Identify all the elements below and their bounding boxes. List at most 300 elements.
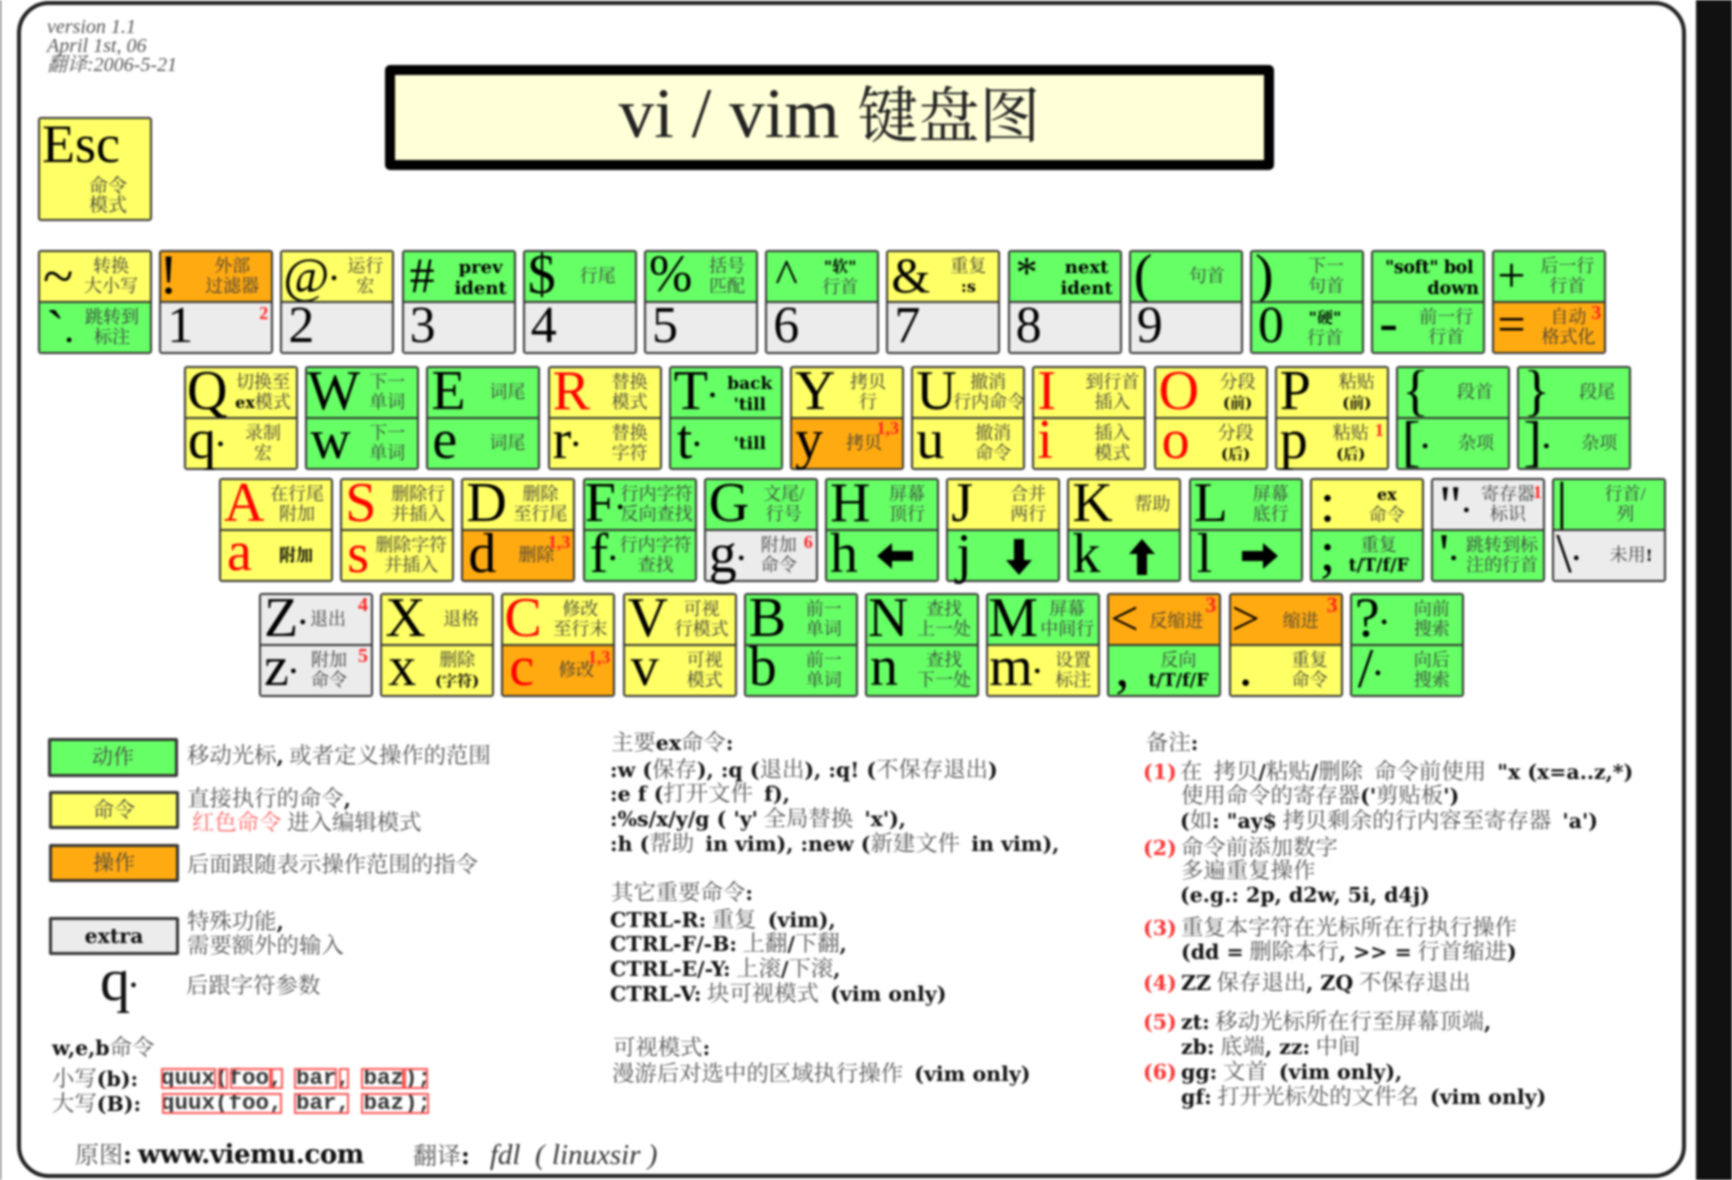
key: H h: h bbox=[830, 523, 858, 585]
key: less-than comma: t/T/f/F bbox=[1148, 671, 1208, 691]
key: K k: 帮助 bbox=[1134, 494, 1170, 514]
ex commands column bbox=[609, 730, 1059, 1088]
key: F f: 行内字符 bbox=[620, 535, 692, 555]
key: B b: B bbox=[749, 587, 786, 649]
left edge line bbox=[0, 0, 1, 1180]
key: & 7: :s bbox=[961, 277, 976, 296]
key: B b: 单词 bbox=[806, 670, 842, 690]
key: ! 1: 1 bbox=[167, 297, 193, 354]
key: R r bbox=[548, 366, 662, 470]
key: V v: 模式 bbox=[687, 670, 723, 690]
legend: extra bbox=[49, 917, 179, 955]
key: double quote / single quote: 注的行首 bbox=[1466, 555, 1538, 575]
key: M m: 设置 bbox=[1055, 650, 1091, 670]
key: H h: 屏幕 bbox=[889, 484, 925, 504]
key: pipe / backslash: | bbox=[1556, 472, 1567, 534]
key: T t: t• bbox=[677, 409, 700, 471]
key: F f: 行内字符 bbox=[621, 484, 693, 504]
key: N n: 上一处 bbox=[917, 619, 971, 639]
key: W w: 下一 bbox=[369, 423, 405, 443]
key: question slash: ?• bbox=[1355, 587, 1388, 649]
key: { [: [• bbox=[1402, 411, 1429, 473]
key: tilde / backtick bbox=[38, 250, 152, 354]
key: K k bbox=[1067, 478, 1181, 582]
key: B b: 前一 bbox=[806, 650, 842, 670]
key: less-than comma bbox=[1107, 593, 1221, 697]
key: } ]: ]• bbox=[1523, 411, 1550, 473]
key: S s: 删除字符 bbox=[375, 535, 447, 555]
key: A a: 附加 bbox=[279, 546, 313, 566]
notes column: 使用命令的寄存器('剪贴板') bbox=[1181, 783, 1459, 808]
key: P p: (后) bbox=[1336, 445, 1365, 463]
key: N n: N bbox=[868, 587, 908, 649]
key: @ 2 bbox=[280, 250, 394, 354]
key: M m: 标注 bbox=[1055, 670, 1091, 690]
key: Z z: 退出 bbox=[310, 609, 346, 629]
key: ) 0: 0 bbox=[1258, 297, 1284, 354]
key: W w bbox=[305, 366, 419, 470]
ASDF row bbox=[217, 472, 1668, 586]
key: question slash bbox=[1350, 593, 1464, 697]
key: double quote / single quote: "• bbox=[1439, 475, 1470, 537]
key: Q q: q• bbox=[188, 409, 224, 471]
key: I i: 到行首 bbox=[1085, 372, 1139, 392]
key: % 5: 括号 bbox=[709, 256, 745, 276]
key: H h: 顶行 bbox=[889, 504, 925, 524]
key: R r: 替换 bbox=[612, 423, 648, 443]
key: pipe / backslash: 未用! bbox=[1610, 545, 1653, 565]
key: @ 2: 运行 bbox=[347, 256, 383, 276]
key: P p: (前) bbox=[1342, 394, 1371, 412]
key: L l: l bbox=[1197, 523, 1212, 585]
key: X x: X bbox=[385, 587, 426, 649]
ex lines: :w (保存), :q (退出), :q! (不保存退出) bbox=[610, 757, 998, 782]
key: $ 4: 行尾 bbox=[580, 266, 616, 286]
key: @ 2: 宏 bbox=[356, 276, 374, 296]
notes column: 在 拷贝/粘贴/删除 命令前使用 "x (x=a..z,*) bbox=[1180, 759, 1633, 784]
key: L l: L bbox=[1194, 472, 1228, 534]
key: U u: u bbox=[916, 409, 944, 471]
legend: command: 命令 bbox=[93, 798, 135, 822]
key: colon semicolon: ; bbox=[1320, 521, 1335, 583]
key: colon semicolon: 命令 bbox=[1369, 505, 1405, 525]
key: P p: 1 bbox=[1375, 420, 1384, 440]
key: G g: 文尾/ bbox=[763, 484, 804, 504]
key: C c: 1,3 bbox=[588, 647, 610, 667]
key: Q q: ex模式 bbox=[235, 392, 291, 412]
key: * 8: ident bbox=[1060, 278, 1113, 299]
key: V v bbox=[623, 593, 737, 697]
key: + =: 后一行 bbox=[1540, 256, 1594, 276]
key: double quote / single quote bbox=[1431, 478, 1545, 582]
notes column: gf: 打开光标处的文件名 (vim only) bbox=[1181, 1084, 1546, 1109]
key: I i: I bbox=[1037, 360, 1056, 422]
key: pipe / backslash: 行首/ bbox=[1605, 484, 1646, 504]
key: double quote / single quote: 标识 bbox=[1490, 504, 1526, 524]
key: O o: (后) bbox=[1221, 445, 1250, 463]
legend: extra: extra bbox=[85, 924, 143, 948]
key: question slash: /• bbox=[1358, 638, 1381, 700]
key: A a: a bbox=[227, 521, 252, 583]
key: greater-than period: 3 bbox=[1327, 592, 1338, 617]
key: F f: 查找 bbox=[638, 555, 674, 575]
key: soft bol _ -: 行首 bbox=[1428, 327, 1464, 347]
legend: action bbox=[48, 738, 178, 777]
key: G g: 命令 bbox=[761, 555, 797, 575]
key: L l bbox=[1189, 478, 1303, 582]
ex commands column: CTRL-F/-B: 上翻/下翻, bbox=[610, 931, 847, 956]
key: V v: V bbox=[628, 587, 668, 649]
key: # 3: prev bbox=[459, 257, 503, 278]
key: O o: O bbox=[1159, 360, 1199, 422]
key: less-than comma: 反向 bbox=[1160, 650, 1196, 670]
w,e,b lowercase example: 小写(b): bbox=[52, 1066, 138, 1091]
key: ( 9 bbox=[1129, 250, 1243, 354]
key: X x bbox=[380, 593, 494, 697]
key: I i: 插入 bbox=[1094, 423, 1130, 443]
key: Z z: 4 bbox=[358, 594, 368, 616]
notes heading: 备注: bbox=[1146, 730, 1198, 755]
version note bbox=[45, 16, 177, 76]
key: double quote / single quote: 寄存器 bbox=[1481, 484, 1535, 504]
key: ( 9: 句首 bbox=[1189, 266, 1225, 286]
legend: operator bbox=[49, 844, 179, 882]
key: Z z: 5 bbox=[358, 645, 368, 667]
key: greater-than period: . bbox=[1239, 636, 1253, 698]
QWERTY row bbox=[182, 360, 1633, 473]
legend text: extra: 特殊功能, bbox=[187, 909, 284, 934]
key: * 8: next bbox=[1065, 257, 1108, 278]
key: ( 9: ( bbox=[1134, 244, 1152, 306]
key: M m: 中间行 bbox=[1040, 619, 1094, 639]
key: } ]: 杂项 bbox=[1581, 433, 1617, 453]
key: O o: o bbox=[1162, 409, 1190, 471]
version note: version 1.1 bbox=[47, 16, 136, 38]
key: L l: 屏幕 bbox=[1253, 484, 1289, 504]
notes column: (如: "ay$ 拷贝剩余的行内容至寄存器 'a') bbox=[1180, 808, 1598, 833]
legend text: operator: 后面跟随表示操作范围的指令 bbox=[187, 852, 478, 877]
key: T t: T• bbox=[674, 360, 716, 422]
key: R r: 替换 bbox=[612, 372, 648, 392]
key: ^ 6: ^ bbox=[775, 250, 798, 303]
key: + =: + bbox=[1497, 247, 1526, 303]
key: W w: 单词 bbox=[369, 392, 405, 412]
key: # 3: ident bbox=[454, 278, 507, 299]
legend: operator: 操作 bbox=[93, 851, 135, 875]
key: P p: P bbox=[1280, 360, 1311, 422]
key: + =: 行首 bbox=[1549, 276, 1585, 296]
key: R r: 字符 bbox=[612, 443, 648, 463]
key: # 3: # bbox=[410, 247, 435, 303]
key: D d bbox=[461, 478, 575, 582]
key: less-than comma: < bbox=[1110, 590, 1139, 646]
key: Y y: Y bbox=[795, 360, 835, 422]
notes column: (dd = 删除本行, >> = 行首缩进) bbox=[1181, 939, 1517, 964]
key: R r: r• bbox=[553, 409, 579, 471]
key: V v: 行模式 bbox=[675, 619, 729, 639]
legend text: command bbox=[187, 786, 422, 835]
key: P p bbox=[1275, 366, 1389, 470]
key: * 8 bbox=[1008, 250, 1122, 354]
key: R r: 模式 bbox=[612, 392, 648, 412]
title: vi / vim 键盘图 bbox=[619, 75, 1040, 153]
key: % 5: 5 bbox=[652, 297, 678, 354]
key: Q q bbox=[184, 366, 298, 470]
key: { [: 段首 bbox=[1457, 382, 1493, 402]
key: $ 4 bbox=[523, 250, 637, 354]
key: J j: 两行 bbox=[1010, 504, 1046, 524]
key: % 5: 匹配 bbox=[709, 276, 745, 296]
key: M m: M bbox=[988, 587, 1038, 649]
key: G g bbox=[704, 478, 818, 582]
key: S s: s bbox=[347, 523, 369, 585]
key: greater-than period bbox=[1229, 593, 1343, 697]
key: O o: 分段 bbox=[1220, 372, 1256, 392]
key: N n: 下一处 bbox=[917, 670, 971, 690]
key: Y y: y bbox=[795, 409, 823, 471]
footer credit: 原图: www.viemu.com bbox=[75, 1140, 364, 1170]
key: E e: 词尾 bbox=[489, 433, 525, 453]
key: + =: 3 bbox=[1591, 302, 1601, 324]
key: T t bbox=[669, 366, 783, 470]
key: V v: 可视 bbox=[687, 650, 723, 670]
key: ) 0: ) bbox=[1255, 244, 1274, 306]
key: B b: 单词 bbox=[806, 619, 842, 639]
key: Q q: 宏 bbox=[254, 443, 272, 463]
key: { [: { bbox=[1402, 360, 1429, 422]
key: ) 0: 行首 bbox=[1307, 328, 1343, 348]
key: S s: 删除行 bbox=[391, 484, 445, 504]
key: D d: D bbox=[466, 472, 507, 534]
number row bbox=[36, 244, 1608, 362]
w,e,b uppercase example: quux(foo, bar, baz); bbox=[161, 1090, 431, 1116]
key: ) 0: "硬" bbox=[1309, 308, 1341, 327]
legend text: extra bbox=[186, 908, 344, 958]
key: U u bbox=[911, 366, 1025, 470]
key: tilde / backtick: 跳转到 bbox=[85, 307, 139, 327]
key: U u: 撤消 bbox=[975, 423, 1011, 443]
key: greater-than period: 缩进 bbox=[1283, 611, 1319, 631]
key: E e: 词尾 bbox=[489, 382, 525, 402]
key: U u: 行内命令 bbox=[953, 392, 1025, 412]
notes column: zt: 移动光标所在行至屏幕顶端, bbox=[1181, 1009, 1491, 1034]
key: # 3 bbox=[402, 250, 516, 354]
key: I i: i bbox=[1037, 409, 1053, 471]
legend text: extra: 需要额外的输入 bbox=[187, 933, 344, 958]
w,e,b heading: w,e,b命令 bbox=[52, 1035, 154, 1060]
key: # 3: 3 bbox=[410, 297, 436, 354]
key: S s bbox=[340, 478, 454, 582]
version note: April 1st, 06 bbox=[47, 35, 146, 57]
key: P p: 粘贴 bbox=[1333, 423, 1369, 443]
key: W w: w bbox=[310, 409, 351, 471]
key: colon semicolon: : bbox=[1320, 472, 1335, 534]
key: colon semicolon: 重复 bbox=[1361, 535, 1397, 555]
key: P p: p bbox=[1280, 409, 1308, 471]
key: ^ 6: "软" bbox=[824, 257, 857, 276]
key: A a: 附加 bbox=[279, 504, 315, 524]
note 2: (2) bbox=[1143, 836, 1177, 860]
key: & 7: 7 bbox=[894, 297, 920, 354]
key: pipe / backslash: 列 bbox=[1616, 504, 1634, 524]
ex heading: 主要ex命令: bbox=[611, 730, 733, 755]
key: less-than comma: 反缩进 bbox=[1149, 611, 1203, 631]
key: G g: G bbox=[709, 472, 749, 534]
key: F f: 反向查找 bbox=[621, 504, 693, 524]
key: Y y: 拷贝 bbox=[846, 433, 882, 453]
ex commands column: :e f (打开文件 f), bbox=[610, 781, 790, 806]
key: double quote / single quote: 1 bbox=[1533, 482, 1542, 502]
key: Q q: Q bbox=[187, 360, 227, 422]
ex commands column: CTRL-V: 块可视模式 (vim only) bbox=[610, 981, 946, 1006]
key: tilde / backtick: ~ bbox=[43, 246, 73, 308]
key: tilde / backtick: `• bbox=[46, 300, 73, 362]
icon: up arrow bbox=[1128, 538, 1156, 577]
key: T t: back bbox=[727, 374, 772, 394]
other commands heading: 其它重要命令: bbox=[611, 880, 753, 905]
legend: action: 动作 bbox=[92, 745, 134, 769]
key: N n: 查找 bbox=[926, 650, 962, 670]
key: X x: 退格 bbox=[443, 609, 479, 629]
right black strip bbox=[1696, 0, 1732, 1180]
key: S s: S bbox=[345, 472, 376, 534]
key: D d: 至行尾 bbox=[513, 504, 567, 524]
key: I i: 插入 bbox=[1094, 392, 1130, 412]
notes column: ZZ 保存退出, ZQ 不保存退出 bbox=[1181, 970, 1471, 995]
key: A a bbox=[219, 478, 333, 582]
key: Z z: Z• bbox=[264, 587, 306, 649]
key: tilde / backtick: 标注 bbox=[94, 327, 130, 347]
note 4: (4) bbox=[1143, 971, 1177, 995]
key: $ 4: $ bbox=[528, 244, 556, 306]
key: W w: 单词 bbox=[369, 443, 405, 463]
key: Q q: 录制 bbox=[245, 423, 281, 443]
key: ^ 6 bbox=[765, 250, 879, 354]
key: } ]: 段尾 bbox=[1579, 382, 1615, 402]
key: D d: 1,3 bbox=[548, 532, 570, 552]
key: & 7: & bbox=[891, 247, 930, 303]
key: C c: 修改 bbox=[562, 599, 598, 619]
key: $ 4: 4 bbox=[531, 297, 557, 354]
key: Y y: 1,3 bbox=[876, 418, 899, 438]
key: Y y bbox=[790, 366, 904, 470]
key: W w: 下一 bbox=[369, 372, 405, 392]
key: + =: 格式化 bbox=[1541, 327, 1595, 347]
key: U u: U bbox=[916, 360, 957, 422]
note 5: (5) bbox=[1143, 1010, 1177, 1034]
key: Y y: 行 bbox=[859, 392, 877, 412]
key: Esc bbox=[38, 117, 152, 221]
key: ! 1: 2 bbox=[259, 303, 268, 323]
key: N n: 查找 bbox=[926, 599, 962, 619]
legend text: action: 移动光标, 或者定义操作的范围 bbox=[187, 743, 491, 768]
key: N n: n bbox=[870, 636, 898, 698]
key: G g: 行号 bbox=[766, 504, 802, 524]
icon: right arrow bbox=[1240, 542, 1280, 570]
key: greater-than period: > bbox=[1232, 590, 1260, 646]
ex commands column: :h (帮助 in vim), :new (新建文件 in vim), bbox=[610, 831, 1059, 856]
key: V v: v bbox=[631, 636, 659, 698]
key: ( 9: 9 bbox=[1137, 297, 1163, 354]
key: B b: 前一 bbox=[806, 599, 842, 619]
key: X x: x bbox=[388, 636, 416, 698]
key: tilde / backtick: 转换 bbox=[93, 256, 129, 276]
key: E e bbox=[426, 366, 540, 470]
key: S s: 并插入 bbox=[391, 504, 445, 524]
legend: command bbox=[49, 791, 179, 829]
key: R r: R bbox=[553, 360, 590, 422]
key: Esc: Esc bbox=[42, 114, 120, 174]
key: ^ 6: 6 bbox=[773, 297, 799, 354]
icon: left arrow bbox=[876, 542, 915, 570]
icon: down arrow bbox=[1005, 537, 1033, 576]
key: Esc: 模式 bbox=[89, 195, 127, 216]
notes column: 命令前添加数字 bbox=[1181, 835, 1338, 860]
key: F f bbox=[583, 478, 697, 582]
visual mode line: 漫游后对选中的区域执行操作 (vim only) bbox=[612, 1061, 1030, 1086]
key: & 7: 重复 bbox=[950, 256, 986, 276]
key: H h: H bbox=[830, 472, 870, 534]
key: M m: m• bbox=[989, 636, 1041, 698]
title bbox=[385, 65, 1274, 170]
key: Q q: 切换至 bbox=[236, 372, 290, 392]
legend text: q dot: 后跟字符参数 bbox=[186, 973, 320, 998]
key: @ 2: @• bbox=[283, 247, 337, 303]
key: Esc: 命令 bbox=[89, 176, 127, 197]
key: T t: 'till bbox=[734, 395, 766, 415]
key: U u: 撤消 bbox=[970, 372, 1006, 392]
key: less-than comma: , bbox=[1115, 637, 1129, 699]
key: colon semicolon bbox=[1310, 478, 1424, 582]
key: D d: d bbox=[468, 523, 496, 585]
key: X x: (字符) bbox=[435, 672, 479, 690]
key: pipe / backslash bbox=[1552, 478, 1666, 582]
key: question slash: 向前 bbox=[1414, 599, 1450, 619]
visual mode heading: 可视模式: bbox=[613, 1035, 710, 1060]
key: J j bbox=[946, 478, 1060, 582]
legend text: command: 红色命令 进入编辑模式 bbox=[192, 810, 422, 835]
key: F f: F• bbox=[585, 472, 624, 534]
key: { [ bbox=[1396, 366, 1510, 470]
ex commands column: :%s/x/y/g ( 'y' 全局替换 'x'), bbox=[610, 806, 906, 831]
w,e,b uppercase example: 大写(B): bbox=[52, 1091, 141, 1116]
key: I i: 模式 bbox=[1094, 443, 1130, 463]
key: K k: k bbox=[1072, 523, 1100, 585]
key: % 5 bbox=[644, 250, 758, 354]
key: ! 1: 过滤器 bbox=[205, 276, 259, 296]
key: & 7 bbox=[886, 250, 1000, 354]
note 6: (6) bbox=[1143, 1060, 1177, 1084]
ZXCV row bbox=[257, 587, 1466, 700]
key: O o: (前) bbox=[1223, 394, 1252, 412]
footer translator: 翻译: fdl ( linuxsir ) bbox=[413, 1139, 657, 1171]
key: V v: 可视 bbox=[684, 599, 720, 619]
key: A a: A bbox=[224, 472, 264, 534]
notes column: (e.g.: 2p, d2w, 5i, d4j) bbox=[1180, 883, 1430, 907]
key: T t: 'till bbox=[734, 434, 766, 454]
key: ) 0 bbox=[1250, 250, 1364, 354]
key: E e: E bbox=[431, 360, 466, 422]
key: soft bol _ -: down bbox=[1427, 279, 1479, 299]
key: double quote / single quote: '• bbox=[1439, 523, 1457, 585]
notes column: 多遍重复操作 bbox=[1181, 858, 1315, 883]
notes column: 重复本字符在光标所在行执行操作 bbox=[1181, 915, 1517, 940]
key: % 5: % bbox=[649, 246, 692, 303]
key: C c: C bbox=[504, 587, 542, 649]
key: tilde / backtick: 大小写 bbox=[84, 276, 138, 296]
key: Z z: 附加 bbox=[311, 650, 347, 670]
key: * 8: 8 bbox=[1016, 297, 1042, 354]
